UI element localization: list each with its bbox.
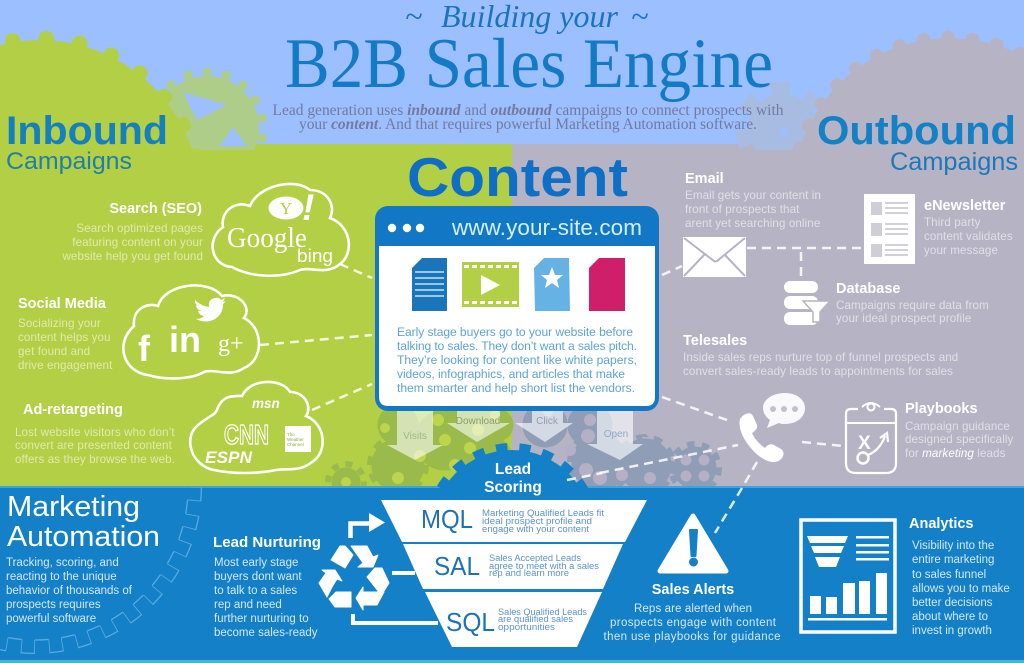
cloud outline (123, 285, 259, 378)
text: marketing automation description (6, 557, 133, 625)
cloud: ad networks (190, 382, 323, 473)
browser body text: them smarter and help short list the vendors. (397, 381, 635, 395)
text: ad retargeting (15, 402, 175, 466)
text: sales alerts (604, 582, 780, 643)
text: enewsletter: content validates (924, 230, 1013, 243)
yahoo logo: Y (280, 199, 292, 218)
icon: sales alert triangle (660, 516, 726, 571)
cloud outline (190, 382, 323, 473)
gear holes: grey (543, 407, 710, 485)
cnn logo: CNN (224, 419, 269, 450)
facebook icon: f (138, 328, 151, 369)
text: marketing automation description: behavior of thousands of (6, 585, 133, 597)
background: sky header (0, 0, 1024, 144)
text: lead nurturing: buyers dont want (214, 571, 302, 583)
browser frame (375, 206, 659, 411)
icon: telephone with speech bubble (739, 393, 805, 462)
text: database (836, 281, 989, 325)
browser window (375, 206, 659, 411)
phone handset (739, 413, 784, 462)
gear: lead scoring (429, 447, 595, 613)
funnel stage: sql (425, 592, 602, 647)
arrow: visits: Visits (403, 431, 427, 442)
browser body text: They’re looking for content like white papers, (397, 353, 637, 367)
icon: analytics dashboard (801, 520, 895, 632)
weather channel logo: The (287, 432, 295, 437)
text: social media (18, 296, 113, 372)
connector: alerts in band (715, 488, 742, 533)
text: social media: get found and (18, 345, 90, 358)
arrow: click (515, 410, 573, 442)
msn logo: msn (252, 396, 280, 411)
browser body text (397, 325, 637, 395)
text: sales alerts: prospects engage with content (610, 617, 777, 629)
google logo: Google (227, 222, 307, 254)
text: ad retargeting: Ad-retargeting (23, 402, 123, 418)
weather channel logo: Channel (287, 442, 304, 447)
funnel stage: sal: SAL (434, 551, 480, 581)
heading: inbound campaigns (6, 109, 168, 175)
text: social media: Social Media (18, 296, 107, 312)
text: telesales (683, 333, 958, 378)
text: lead nurturing (213, 535, 321, 639)
text: playbooks: Playbooks (905, 401, 978, 417)
text: analytics: better decisions (912, 597, 993, 609)
gear: outbound small (736, 82, 818, 150)
text: search seo: website help you get found (61, 250, 203, 263)
arrow: download: Download (456, 416, 500, 427)
funnel stage: mql: MQL (421, 504, 473, 534)
text: ad retargeting: Lost website visitors who don’t (15, 426, 175, 439)
icon: playbook clipboard (846, 403, 896, 473)
arrow: open: Open (604, 429, 628, 440)
funnel stage: sal: agree to meet with a sales (489, 561, 600, 571)
speech bubble (763, 393, 805, 428)
text: search seo (61, 201, 203, 263)
text: email (685, 171, 821, 230)
cloud: search (213, 184, 349, 276)
subtitle (272, 102, 784, 133)
icon: video film (462, 262, 519, 307)
funnel stage: sql: opportunities (498, 622, 556, 632)
gears: green cluster (325, 410, 514, 486)
text: analytics: to sales funnel (912, 569, 986, 581)
connector: sql to recycle (353, 614, 438, 623)
icon: enewsletter (864, 194, 915, 264)
text: database: Campaigns require data from (836, 299, 989, 312)
text: telesales: convert sales-ready leads to appointments for sales (683, 365, 953, 378)
espn logo: ESPN (205, 448, 253, 467)
text: playbooks: designed specifically (905, 433, 1014, 446)
text: ad retargeting: convert are presented content (15, 439, 173, 452)
text: analytics: Analytics (909, 516, 973, 532)
connector: lead scoring dots (567, 473, 602, 480)
text: playbooks: Campaign guidance (905, 420, 1010, 433)
bing logo: bing (297, 246, 333, 266)
text: search seo: featuring content on your (72, 236, 203, 249)
band top highlight (0, 486, 1024, 488)
gear: inbound small (166, 68, 267, 150)
arrow: visits (387, 410, 443, 460)
text: email: arent yet searching online (685, 217, 820, 230)
heading: inbound campaigns: Campaigns (6, 148, 132, 175)
text: playbooks (905, 401, 1014, 460)
cloud: social (123, 285, 259, 378)
icon: star document (534, 258, 570, 311)
gear outline: marketing automation (0, 487, 202, 654)
text: marketing automation description: prospects requires (6, 599, 101, 611)
heading: content: Content (407, 146, 628, 208)
text: marketing automation description: Tracking, scoring, and (6, 557, 119, 569)
twitter icon (195, 298, 226, 322)
arrow: funnel to recycle (392, 571, 415, 575)
text: sales alerts: then use playbooks for guidance (604, 631, 780, 643)
heading: outbound campaigns: Campaigns (890, 148, 1018, 176)
text: enewsletter: Third party (924, 216, 981, 229)
icon: recycle (319, 546, 389, 610)
gears: grey cluster (522, 411, 722, 486)
title: B2B Sales Engine (285, 25, 773, 103)
text: analytics: Visibility into the (912, 540, 994, 552)
text: lead scoring: Scoring (484, 479, 542, 496)
text: search seo: Search optimized pages (76, 222, 203, 235)
funnel stage: mql: engage with your content (482, 524, 590, 534)
text: search seo: Search (SEO) (109, 201, 202, 217)
text: email: front of prospects that (685, 203, 800, 216)
icon: document (412, 258, 447, 311)
arrow: nurture back to funnel (350, 513, 385, 538)
browser content area (379, 246, 655, 406)
text: analytics: about where to (912, 611, 988, 623)
text: lead scoring (484, 461, 542, 496)
funnel stage: mql: ideal prospect profile and (482, 516, 592, 526)
heading: marketing automation: Automation (7, 521, 160, 553)
text: analytics: invest in growth (912, 625, 992, 637)
google plus icon: g+ (218, 331, 244, 357)
text: enewsletter: eNewsletter (924, 198, 1006, 214)
text: email: Email (685, 171, 724, 187)
funnel: lead stages (381, 500, 647, 647)
arrow: open (587, 410, 643, 460)
funnel stage: sql: are qualified sales (498, 614, 574, 624)
funnel stage: sal (403, 544, 623, 589)
linkedin icon: in (169, 319, 201, 360)
header gears (0, 31, 1024, 150)
browser body text: talking to sales. They don’t want a sales pitch. (397, 339, 637, 353)
gear: inbound large (0, 31, 200, 150)
heading: outbound campaigns (817, 109, 1018, 176)
text: social media: content helps you (18, 331, 111, 344)
heading: marketing automation: Marketing (7, 491, 140, 523)
text: playbooks: for marketing leads (905, 447, 1006, 460)
funnel stage: mql (381, 500, 647, 542)
text: marketing automation description: reacting to the unique (6, 571, 117, 583)
browser body text: videos, infographics, and articles that make (397, 367, 625, 381)
text: analytics: entire marketing (912, 554, 994, 566)
text: sales alerts: Sales Alerts (652, 582, 734, 598)
panel: outbound background (512, 144, 1024, 487)
text: lead nurturing: Most early stage (214, 557, 298, 569)
text: telesales: Telesales (683, 333, 747, 349)
heading: inbound campaigns: Inbound (6, 109, 168, 153)
window dots (388, 224, 424, 232)
funnel stage: sal: rep and learn more (489, 568, 569, 578)
text: email: Email gets your content in (685, 189, 821, 202)
panel: marketing automation band (0, 487, 1024, 660)
connector lines (260, 248, 863, 488)
text: lead scoring: Lead (495, 461, 531, 478)
icon: database (784, 281, 830, 325)
icon: envelope (683, 237, 746, 277)
icon: pink document (589, 258, 625, 311)
weather channel logo: Weather (287, 437, 304, 442)
text: lead nurturing: rep and need (214, 599, 282, 611)
text: lead nurturing: to talk to a sales (214, 585, 297, 597)
weather channel logo (285, 426, 311, 452)
cloud outline (213, 184, 349, 276)
text: enewsletter (924, 198, 1013, 257)
funnel stage: sql: Sales Qualified Leads (498, 607, 588, 617)
heading: marketing automation (7, 491, 160, 553)
text: sales alerts: Reps are alerted when (634, 603, 752, 615)
text: enewsletter: your message (924, 244, 998, 257)
heading: outbound campaigns: Outbound (817, 109, 1016, 153)
yahoo logo (268, 187, 314, 228)
gear holes: green (341, 410, 500, 487)
text: database: your ideal prospect profile (836, 312, 971, 325)
text: lead nurturing: become sales-ready (214, 627, 318, 639)
yahoo logo: ! (302, 187, 314, 228)
funnel stage: sql: SQL (446, 607, 495, 637)
funnel stage: sal: Sales Accepted Leads (489, 553, 582, 563)
decorative gears behind arrows (325, 410, 722, 486)
text: analytics: allows you to make (912, 583, 1010, 595)
gear: outbound large (793, 31, 1024, 150)
subtitle: Lead generation uses inbound and outbound campaigns to connect prospects with (272, 102, 784, 119)
band bottom stripe (0, 660, 1024, 663)
text: analytics (909, 516, 1010, 637)
text: lead nurturing: Lead Nurturing (213, 535, 321, 551)
text: marketing automation description: powerful software (6, 613, 96, 625)
funnel stage: mql: Marketing Qualified Leads fit (482, 508, 605, 518)
subtitle: your content. And that requires powerful Marketing Automation software. (299, 116, 757, 133)
text: telesales: Inside sales reps nurture top of funnel prospects and (683, 351, 958, 364)
arrow: download (447, 410, 510, 442)
arrow: click: Click (536, 416, 559, 427)
text: lead nurturing: further nurturing to (214, 613, 309, 625)
text: database: Database (836, 281, 900, 297)
icon: playbook clipboard: X (858, 433, 871, 454)
browser body text: Early stage buyers go to your website before (397, 325, 633, 339)
text: social media: drive engagement (18, 359, 113, 372)
panel: inbound background (0, 144, 512, 487)
url: www.your-site.com (451, 215, 642, 240)
text: social media: Socializing your (18, 317, 101, 330)
text: ad retargeting: offers as they browse the web. (15, 453, 175, 466)
